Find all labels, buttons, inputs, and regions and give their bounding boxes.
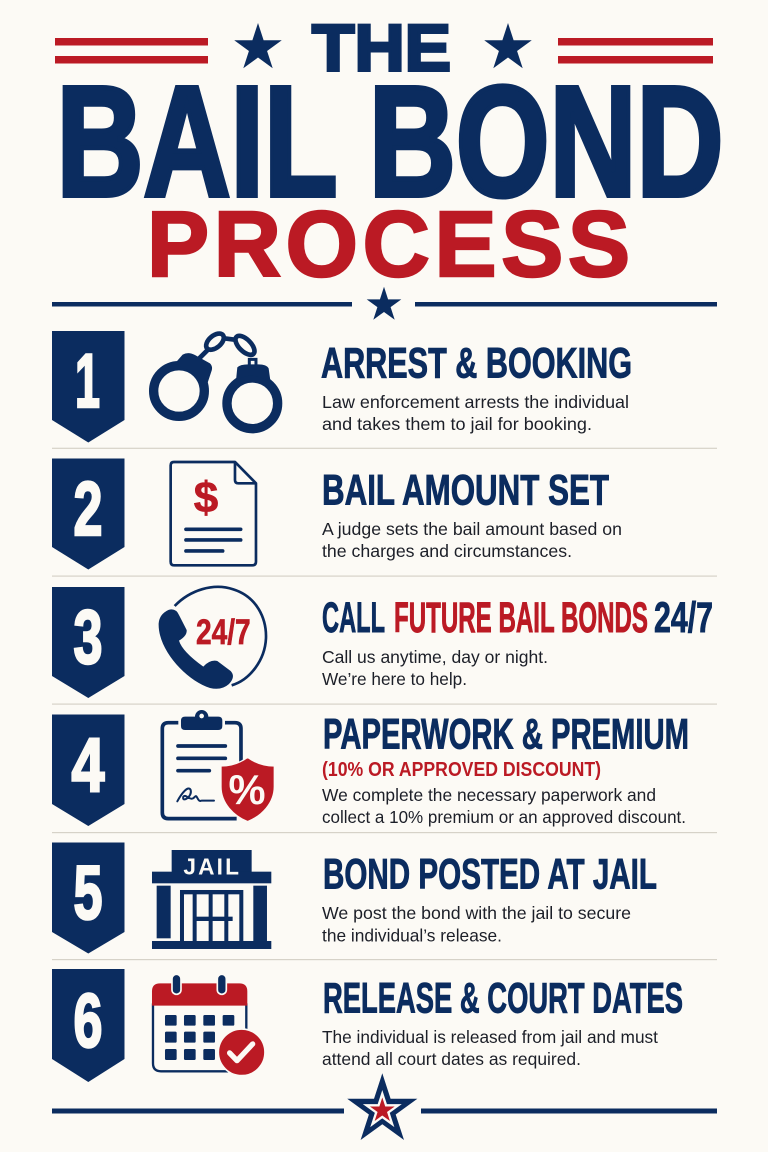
number badge 6 — [52, 969, 124, 1082]
left red stripes — [55, 38, 208, 64]
number badge 2: 2 — [74, 467, 102, 552]
icon: phone with 24/7 — [159, 587, 266, 689]
heading 2: BAIL AMOUNT SET — [322, 466, 609, 514]
icon: document with dollar sign — [171, 462, 256, 565]
number badge 3: 3 — [74, 595, 102, 680]
right red stripes — [558, 38, 713, 64]
header divider with star — [52, 287, 717, 320]
step 2 panel — [52, 458, 622, 570]
icon: calendar with check — [152, 974, 265, 1076]
description 3 — [322, 647, 548, 689]
step 5 panel — [52, 842, 657, 954]
title: THE: THE — [312, 10, 451, 84]
description 5: We post the bond with the jail to secure — [322, 903, 631, 923]
number badge 5: 5 — [74, 851, 102, 936]
icon: phone with 24/7: 24/7 — [196, 613, 251, 652]
step 3 panel — [52, 587, 713, 698]
number badge 3 — [52, 587, 124, 698]
icon: left star — [234, 23, 282, 68]
heading 3: CALL — [322, 594, 385, 642]
description 3: Call us anytime, day or night. — [322, 647, 548, 667]
heading 1: ARREST & BOOKING — [321, 340, 632, 388]
icon: handcuffs — [154, 330, 278, 429]
icon: jail building — [152, 850, 271, 949]
footer divider with layered star — [52, 1073, 717, 1140]
icon: document with dollar sign: $ — [194, 474, 218, 523]
description 3: We’re here to help. — [322, 669, 467, 689]
description 5 — [322, 903, 631, 946]
icon: right star — [484, 23, 532, 68]
number badge 6: 6 — [74, 979, 102, 1064]
description 1: and takes them to jail for booking. — [322, 414, 592, 434]
description 5: the individual’s release. — [322, 926, 502, 946]
description 1 — [322, 392, 629, 434]
number badge 1: 1 — [75, 339, 100, 424]
description 6 — [322, 1027, 658, 1069]
description 4: We complete the necessary paperwork and — [322, 785, 656, 805]
title: PROCESS: PROCESS — [147, 192, 630, 296]
description 4: collect a 10% premium or an approved discount. — [322, 807, 686, 827]
description 2 — [322, 519, 622, 561]
header: title block — [55, 10, 724, 296]
description 6: attend all court dates as required. — [322, 1049, 581, 1069]
description 2: A judge sets the bail amount based on — [322, 519, 622, 539]
icon: jail building: JAIL — [183, 853, 239, 879]
step 1 panel — [52, 330, 632, 442]
number badge 4: 4 — [72, 723, 104, 808]
number badge 5 — [52, 842, 124, 954]
description 6: The individual is released from jail and must — [322, 1027, 658, 1047]
number badge 1 — [52, 331, 124, 442]
description 1: Law enforcement arrests the individual — [322, 392, 629, 412]
step 6 panel — [52, 969, 683, 1082]
step 4 panel — [52, 710, 689, 827]
heading 3: 24/7 — [654, 594, 713, 642]
icon: clipboard with percent shield — [162, 710, 274, 822]
icon: clipboard with percent shield: % — [228, 766, 266, 813]
number badge 2 — [52, 458, 124, 570]
subheading 4: (10% OR APPROVED DISCOUNT) — [322, 759, 601, 781]
number badge 4 — [52, 714, 124, 826]
description 2: the charges and circumstances. — [322, 541, 572, 561]
description 4 — [322, 785, 686, 827]
